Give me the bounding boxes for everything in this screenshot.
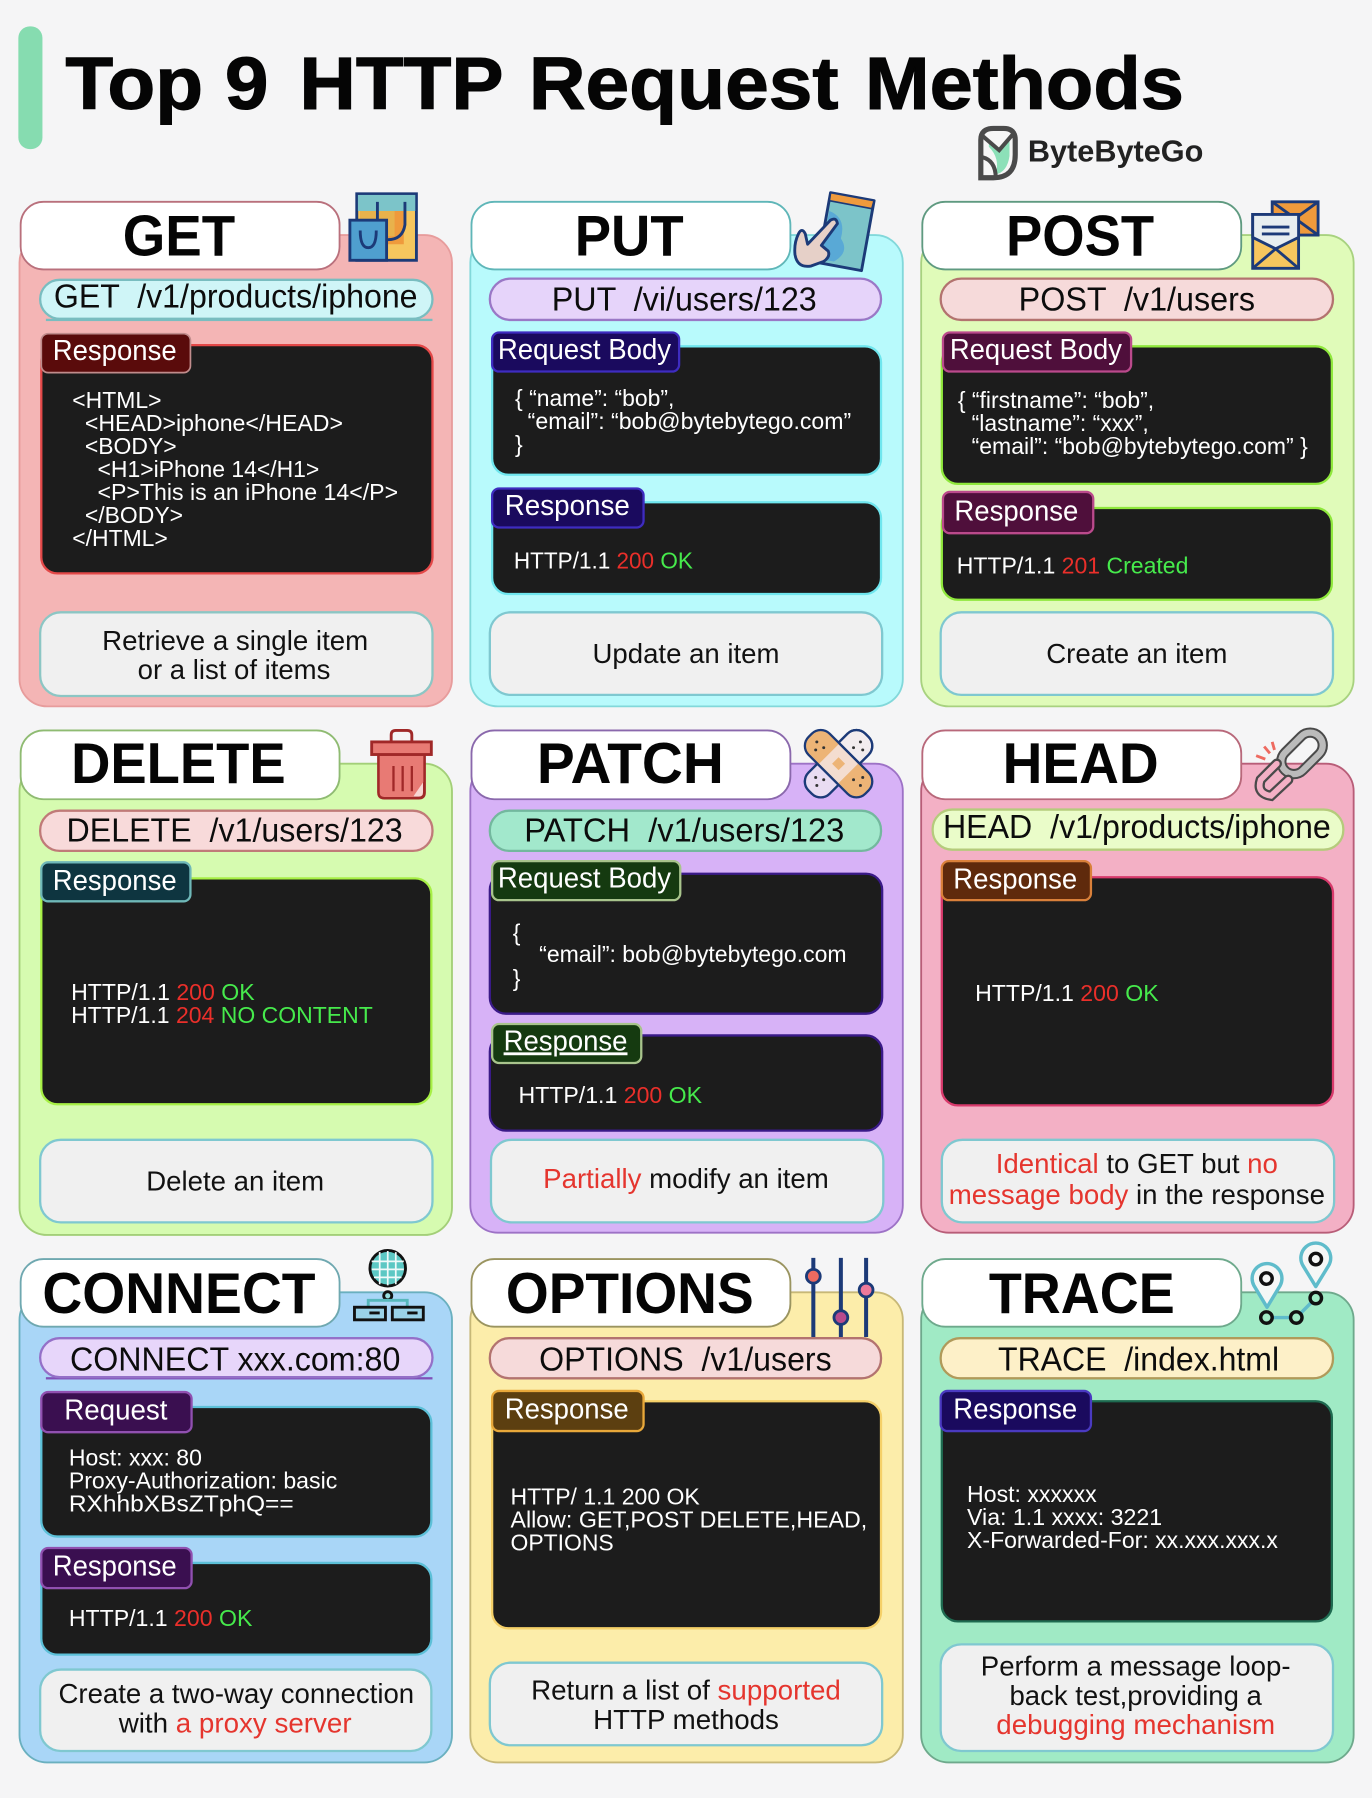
- PUT endpoint: [490, 279, 881, 320]
- OPTIONS panel background: [470, 1292, 903, 1762]
- HEAD description: [942, 1140, 1334, 1222]
- GET response tab: Response: [53, 335, 177, 367]
- CONNECT request text: RXhhbXBsZTphQ==: [69, 1490, 294, 1516]
- PATCH request body text: {: [513, 919, 521, 945]
- PUT request body text: [515, 385, 851, 457]
- POST response tab: [943, 492, 1093, 533]
- OPTIONS response tab: Response: [505, 1393, 629, 1425]
- HEAD heading: [922, 730, 1241, 799]
- OPTIONS response tab: [492, 1391, 644, 1431]
- GET description: Retrieve a single item: [102, 625, 368, 656]
- GET description: or a list of items: [138, 654, 330, 685]
- PUT heading: PUT: [575, 205, 684, 269]
- CONNECT response tab: Response: [53, 1551, 177, 1583]
- TRACE response box: [942, 1401, 1332, 1621]
- PATCH request body text: “email”: bob@bytebytego.com: [539, 941, 847, 967]
- title: [65, 42, 1184, 125]
- PUT heading: [471, 202, 790, 269]
- icon: shopping bags: [350, 194, 416, 260]
- title: HTTP: [299, 42, 504, 125]
- DELETE description: Delete an item: [146, 1165, 324, 1196]
- TRACE description: Perform a message loop-: [981, 1650, 1291, 1681]
- CONNECT request text: Host: xxx: 80: [69, 1444, 202, 1470]
- CONNECT response tab: [41, 1548, 192, 1588]
- GET description: [40, 612, 432, 696]
- OPTIONS response text: Allow: GET,POST DELETE,HEAD,: [510, 1506, 867, 1532]
- panel: HEAD: [921, 727, 1354, 1233]
- PUT request body text: }: [515, 431, 523, 457]
- icon: globe network: [354, 1250, 423, 1320]
- icon: hand tapping phone: [795, 193, 874, 271]
- OPTIONS response text: HTTP/ 1.1 200 OK: [510, 1483, 700, 1509]
- OPTIONS response box: [492, 1401, 881, 1628]
- TRACE response tab: [941, 1391, 1091, 1431]
- HEAD heading: HEAD: [1003, 732, 1159, 796]
- CONNECT request box: [41, 1407, 431, 1537]
- PATCH heading: PATCH: [537, 732, 724, 796]
- brand logo: ByteByteGo: [981, 128, 1203, 178]
- PATCH panel background: [470, 764, 903, 1233]
- HEAD endpoint: HEAD /v1/products/iphone: [943, 809, 1331, 846]
- CONNECT heading: CONNECT: [42, 1262, 315, 1326]
- OPTIONS description: Return a list of supported: [531, 1674, 841, 1705]
- POST request body tab: Request Body: [950, 334, 1123, 366]
- panel: TRACE: [921, 1243, 1354, 1762]
- PATCH request body text: }: [513, 965, 521, 991]
- CONNECT request text: [69, 1444, 337, 1516]
- CONNECT request tab: Request: [64, 1395, 168, 1427]
- GET heading: GET: [123, 205, 235, 269]
- icon: crossed bandages: [800, 725, 878, 803]
- POST request body box: [942, 346, 1332, 484]
- PATCH request body box: [490, 874, 882, 1014]
- PUT request body text: “email”: “bob@bytebytego.com”: [528, 408, 851, 434]
- POST endpoint: POST /v1/users: [1019, 282, 1255, 319]
- POST description: Create an item: [1046, 638, 1227, 669]
- TRACE response text: Via: 1.1 xxxx: 3221: [967, 1504, 1162, 1530]
- POST response text: HTTP/1.1 201 Created: [957, 552, 1188, 578]
- PATCH response text: HTTP/1.1 200 OK: [519, 1082, 703, 1108]
- GET heading: [21, 202, 340, 269]
- brand logo: ByteByteGo: ByteByteGo: [1028, 134, 1203, 169]
- HEAD panel background: [921, 764, 1354, 1233]
- POST endpoint: [941, 279, 1333, 320]
- TRACE response text: X-Forwarded-For: xx.xxx.xxx.x: [967, 1527, 1278, 1553]
- PATCH heading: [471, 730, 790, 799]
- POST description: [941, 612, 1333, 695]
- DELETE response box: [41, 878, 431, 1104]
- GET response text: <HTML>: [72, 387, 161, 413]
- TRACE heading: TRACE: [989, 1262, 1175, 1326]
- HEAD response text: HTTP/1.1 200 OK: [975, 980, 1159, 1006]
- GET endpoint: GET /v1/products/iphone: [54, 278, 418, 315]
- DELETE panel background: [20, 764, 452, 1235]
- DELETE response text: HTTP/1.1 200 OK: [71, 979, 255, 1005]
- GET response text: <BODY>: [85, 433, 177, 459]
- title: Top 9: [65, 42, 268, 125]
- POST request body text: “email”: “bob@bytebytego.com” }: [972, 433, 1308, 459]
- CONNECT description: with a proxy server: [118, 1708, 352, 1739]
- title accent bar: [18, 26, 42, 149]
- TRACE description: debugging mechanism: [996, 1709, 1275, 1740]
- GET response text: [72, 387, 398, 551]
- HEAD response box: [942, 877, 1333, 1105]
- icon: broken chain link: [1256, 727, 1328, 796]
- OPTIONS response text: [510, 1483, 867, 1555]
- PUT request body box: [492, 346, 881, 475]
- TRACE response text: [967, 1481, 1278, 1553]
- TRACE heading: [922, 1259, 1241, 1327]
- PATCH request body tab: Request Body: [498, 863, 672, 895]
- GET response text: <HEAD>iphone</HEAD>: [85, 410, 343, 436]
- CONNECT panel background: [20, 1292, 452, 1762]
- GET response text: <P>This is an iPhone 14</P>: [98, 479, 398, 505]
- DELETE response text: [71, 979, 373, 1028]
- panel: GET: [20, 194, 452, 706]
- DELETE description: [40, 1140, 432, 1222]
- OPTIONS description: [490, 1663, 882, 1745]
- DELETE response text: HTTP/1.1 204 NO CONTENT: [71, 1002, 373, 1028]
- GET panel background: [20, 235, 452, 706]
- TRACE endpoint: [941, 1338, 1333, 1378]
- GET response text: </BODY>: [85, 502, 183, 528]
- panel: CONNECT: [20, 1250, 452, 1762]
- PUT description: Update an item: [593, 638, 779, 669]
- POST response box: [942, 508, 1332, 600]
- POST request body text: [958, 387, 1308, 459]
- PATCH response tab: Response: [504, 1025, 627, 1057]
- PUT description: [490, 612, 882, 695]
- POST request body text: “lastname”: “xxx”,: [972, 410, 1149, 436]
- TRACE description: [941, 1644, 1333, 1751]
- HEAD description: Identical to GET but no: [996, 1148, 1278, 1179]
- icon: trash can: [372, 730, 431, 798]
- OPTIONS response text: OPTIONS: [510, 1529, 614, 1555]
- PATCH request body text: [513, 919, 847, 991]
- icon: envelopes: [1253, 202, 1318, 268]
- panel: PUT: [470, 193, 903, 706]
- title: Methods: [865, 42, 1184, 125]
- POST heading: [922, 202, 1241, 269]
- TRACE panel background: [921, 1292, 1354, 1762]
- DELETE response tab: Response: [53, 865, 177, 897]
- CONNECT response box: [41, 1563, 431, 1655]
- GET response box: [41, 345, 432, 573]
- POST response tab: Response: [954, 496, 1078, 528]
- OPTIONS endpoint: OPTIONS /v1/users: [539, 1341, 832, 1378]
- TRACE endpoint: TRACE /index.html: [998, 1341, 1279, 1378]
- PATCH response box: [490, 1035, 882, 1131]
- GET response text: </HTML>: [72, 525, 168, 551]
- CONNECT request text: Proxy-Authorization: basic: [69, 1467, 337, 1493]
- DELETE endpoint: DELETE /v1/users/123: [67, 813, 403, 850]
- OPTIONS heading: OPTIONS: [506, 1262, 754, 1326]
- PATCH description: [491, 1140, 883, 1222]
- HEAD response tab: Response: [953, 864, 1077, 896]
- POST request body text: { “firstname”: “bob”,: [958, 387, 1154, 413]
- DELETE heading: [21, 730, 340, 799]
- icon: sliders: [806, 1258, 873, 1337]
- PATCH description: Partially modify an item: [543, 1163, 829, 1194]
- CONNECT response text: HTTP/1.1 200 OK: [69, 1605, 253, 1631]
- DELETE heading: DELETE: [71, 732, 286, 796]
- PUT response text: HTTP/1.1 200 OK: [514, 548, 694, 574]
- TRACE response text: Host: xxxxxx: [967, 1481, 1097, 1507]
- HEAD description: message body in the response: [949, 1179, 1325, 1210]
- TRACE description: back test,providing a: [1009, 1680, 1263, 1711]
- CONNECT description: Create a two-way connection: [59, 1678, 414, 1709]
- PATCH endpoint: PATCH /v1/users/123: [524, 813, 844, 850]
- panel: DELETE: [20, 730, 452, 1235]
- GET response text: <H1>iPhone 14</H1>: [98, 456, 319, 482]
- POST heading: POST: [1006, 205, 1154, 269]
- TRACE response tab: Response: [953, 1393, 1077, 1425]
- CONNECT request tab: [41, 1392, 192, 1432]
- panel: POST: [921, 202, 1354, 706]
- icon: route pins: [1252, 1243, 1331, 1323]
- PUT endpoint: PUT /vi/users/123: [552, 282, 817, 319]
- PUT request body text: { “name”: “bob”,: [515, 385, 674, 411]
- PUT panel background: [470, 235, 903, 706]
- PUT response box: [492, 502, 881, 594]
- panel: OPTIONS: [470, 1258, 903, 1762]
- PUT response tab: Response: [505, 490, 630, 522]
- CONNECT endpoint: CONNECT xxx.com:80: [70, 1341, 400, 1378]
- CONNECT description: [40, 1670, 431, 1751]
- PUT response tab: [492, 488, 644, 527]
- POST panel background: [921, 235, 1354, 706]
- PUT request body tab: Request Body: [498, 334, 672, 366]
- title: Request: [529, 42, 839, 125]
- OPTIONS description: HTTP methods: [593, 1704, 779, 1735]
- panel: PATCH: [470, 725, 903, 1233]
